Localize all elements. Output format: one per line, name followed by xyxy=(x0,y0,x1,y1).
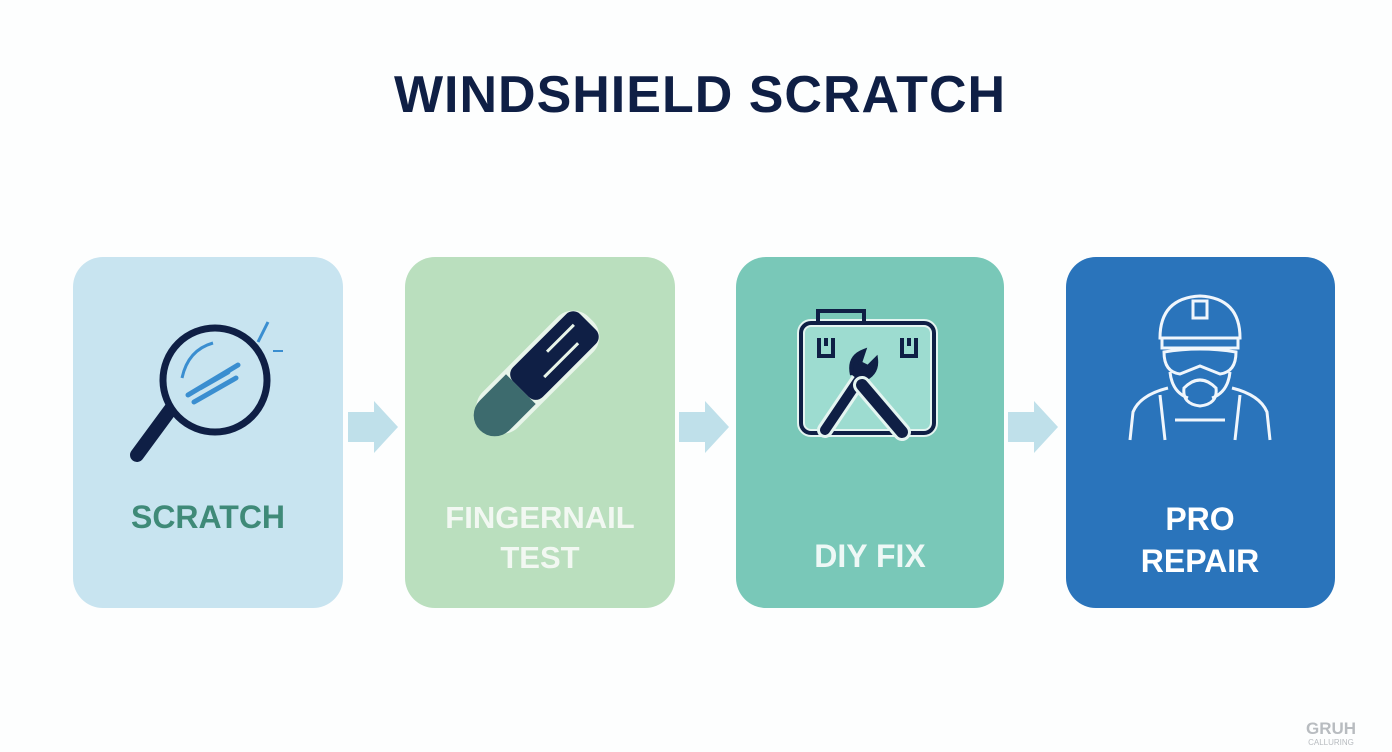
panel: pro repair: REPAIR xyxy=(1141,543,1259,579)
label: fingernail test: FINGERNAIL xyxy=(445,500,635,535)
label: pro repair: PRO xyxy=(1165,501,1235,537)
watermark: CALLURING xyxy=(1308,738,1354,747)
arrow 1 xyxy=(348,401,398,453)
label: diy fix: DIY FIX xyxy=(814,538,926,574)
arrow 3 xyxy=(1008,401,1058,453)
panel: fingernail test xyxy=(405,257,675,608)
panel: scratch xyxy=(73,257,343,608)
icon: toolbox xyxy=(801,311,934,433)
icon: magnifier xyxy=(137,322,283,455)
panel: diy fix xyxy=(736,257,1004,608)
watermark xyxy=(1306,719,1356,747)
arrow 2 xyxy=(679,401,729,453)
panel: fingernail test: TEST xyxy=(500,540,580,575)
label: scratch: SCRATCH xyxy=(131,499,285,535)
icon: worker xyxy=(1130,296,1270,440)
watermark: GRUH xyxy=(1306,719,1356,738)
panel: pro repair xyxy=(1066,257,1335,608)
title: WINDSHIELD SCRATCH xyxy=(394,66,1006,124)
icon: fingernail xyxy=(462,301,609,448)
